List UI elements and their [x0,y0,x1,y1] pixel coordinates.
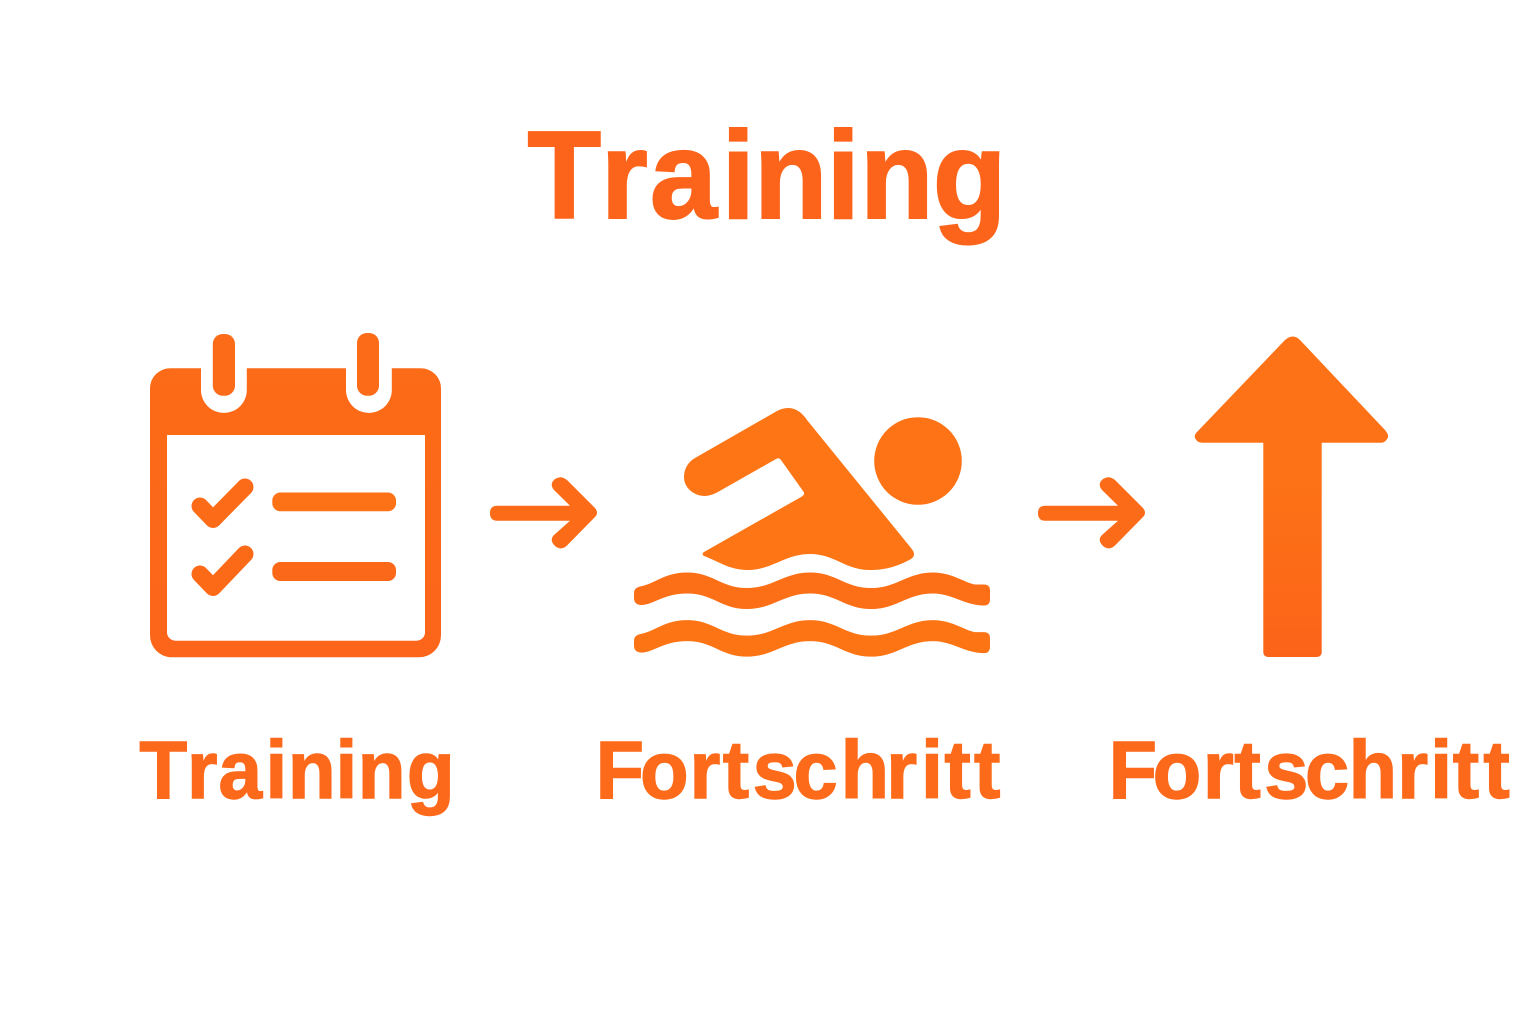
icon: swimmer [634,408,990,657]
arrow: swimmer to progress [1038,477,1145,548]
arrow: calendar to swimmer [490,477,597,548]
label: Fortschritt (swimmer): Fortschritt [596,725,1000,816]
title: Training [527,105,1006,244]
icon: calendar checklist [150,333,441,657]
label: Fortschritt (arrow): Fortschritt [1109,725,1510,816]
label: Training: Training [139,723,455,815]
icon: up arrow [1195,336,1388,657]
